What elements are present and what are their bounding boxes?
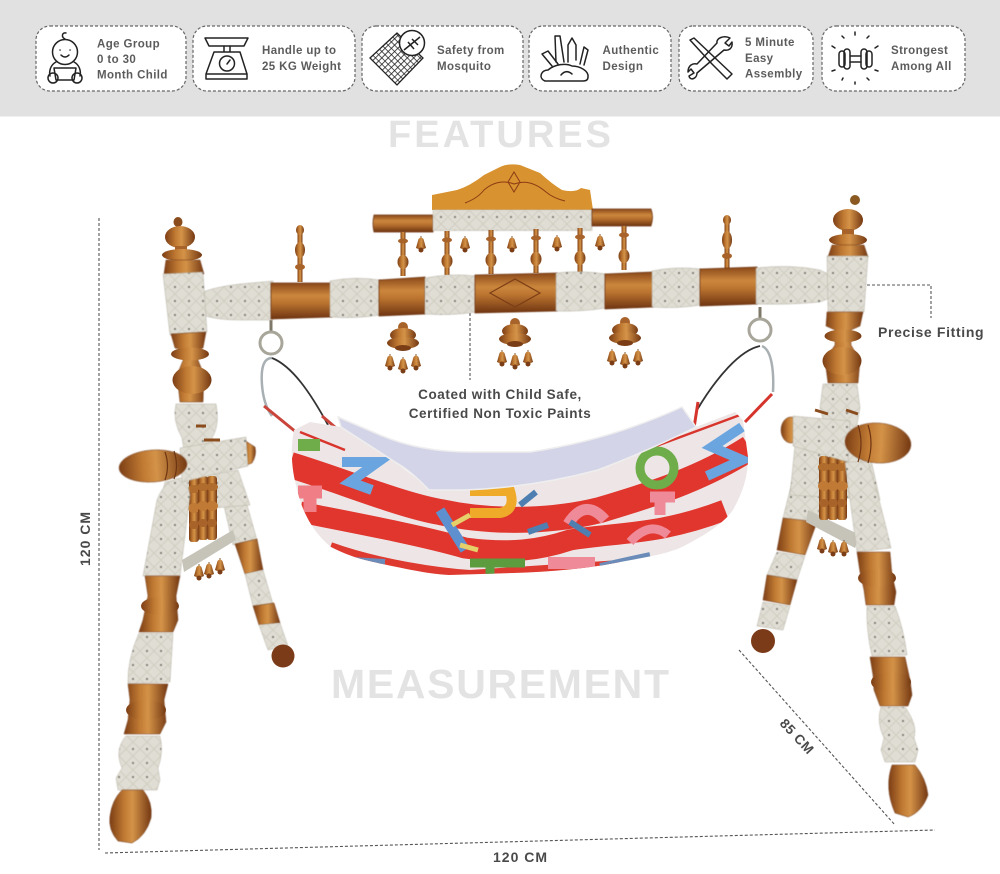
card text: Handle up to	[262, 45, 336, 57]
hammock lining	[338, 407, 696, 490]
main beam	[196, 266, 835, 320]
left post back leg	[218, 480, 294, 668]
hammock	[292, 406, 748, 575]
finial	[828, 195, 868, 257]
pearl block	[827, 256, 868, 312]
card text: 5 Minute	[745, 37, 795, 49]
foot	[889, 765, 928, 817]
right post brace	[806, 510, 860, 548]
icon: crossed tools	[688, 37, 732, 79]
leg joint	[160, 470, 250, 510]
label: width: 120 CM	[493, 849, 548, 865]
label: paint callout: Certified Non Toxic Paints	[409, 406, 591, 421]
hanger: right ring and wires	[264, 307, 773, 432]
crossbar	[118, 426, 256, 484]
hanging bell clusters	[385, 317, 643, 374]
crest carving	[465, 172, 565, 203]
label: precise fitting: Precise Fitting	[878, 324, 984, 340]
leg joint	[790, 445, 880, 500]
card text: 0 to 30	[97, 54, 136, 66]
heading: features: FEATURES	[388, 114, 611, 156]
card text: Authentic	[602, 45, 659, 57]
top feature band	[0, 0, 1000, 116]
crest and upper bar	[373, 164, 652, 232]
hanger: left ring and wires	[260, 320, 328, 425]
right post	[781, 195, 928, 817]
hanging beads	[188, 476, 225, 580]
upper bar copper left	[373, 215, 433, 232]
pearl knob and joint	[175, 404, 217, 450]
card text: Month Child	[97, 70, 168, 82]
small finial right	[722, 215, 732, 270]
card text: Easy	[745, 53, 774, 65]
right post back leg	[751, 470, 828, 653]
beam centre carving	[490, 279, 540, 307]
card: design	[529, 26, 671, 91]
icon: crafted brushes	[541, 36, 588, 81]
card: assembly	[679, 26, 813, 91]
card text: 25 KG Weight	[262, 61, 341, 73]
front leg	[845, 462, 928, 817]
card: age group	[36, 26, 186, 91]
hammock fabric	[292, 412, 748, 575]
upper bar copper right	[592, 209, 652, 226]
turned copper section	[171, 332, 212, 402]
card text: Strongest	[891, 45, 948, 57]
icon: kitchen scale	[205, 38, 248, 79]
icon: dumbbell	[832, 32, 878, 84]
pearl block	[163, 272, 207, 335]
foot	[110, 790, 151, 843]
icon: mosquito net	[370, 30, 424, 85]
hanging beads	[817, 456, 849, 556]
icon: baby	[48, 33, 82, 83]
card text: Assembly	[745, 68, 803, 80]
label: height: 120 CM	[77, 511, 93, 566]
finial	[162, 217, 204, 274]
small finial left	[295, 225, 305, 282]
card text: Among All	[891, 61, 952, 73]
card text: Safety from	[437, 45, 505, 57]
left post	[110, 217, 256, 843]
crest	[432, 164, 593, 210]
left post brace	[182, 530, 236, 572]
card text: Age Group	[97, 38, 160, 50]
turned copper section	[822, 312, 863, 383]
upper bar pearl	[433, 210, 592, 230]
card: mosquito	[362, 26, 523, 91]
card: strength	[822, 26, 965, 91]
hanging spindles and bells	[398, 226, 630, 276]
crossbar	[781, 410, 912, 465]
heading: measurement: MEASUREMENT	[331, 661, 669, 707]
label: paint callout: Coated with Child Safe,	[418, 387, 582, 402]
card text: Design	[602, 61, 643, 73]
card text: Mosquito	[437, 61, 491, 73]
label: depth: 85 CM	[777, 716, 817, 757]
alphabet print	[342, 462, 378, 490]
front leg	[110, 478, 190, 843]
pearl knob and joint	[820, 384, 860, 430]
dimension lines	[99, 218, 935, 853]
card: weight	[193, 26, 355, 91]
